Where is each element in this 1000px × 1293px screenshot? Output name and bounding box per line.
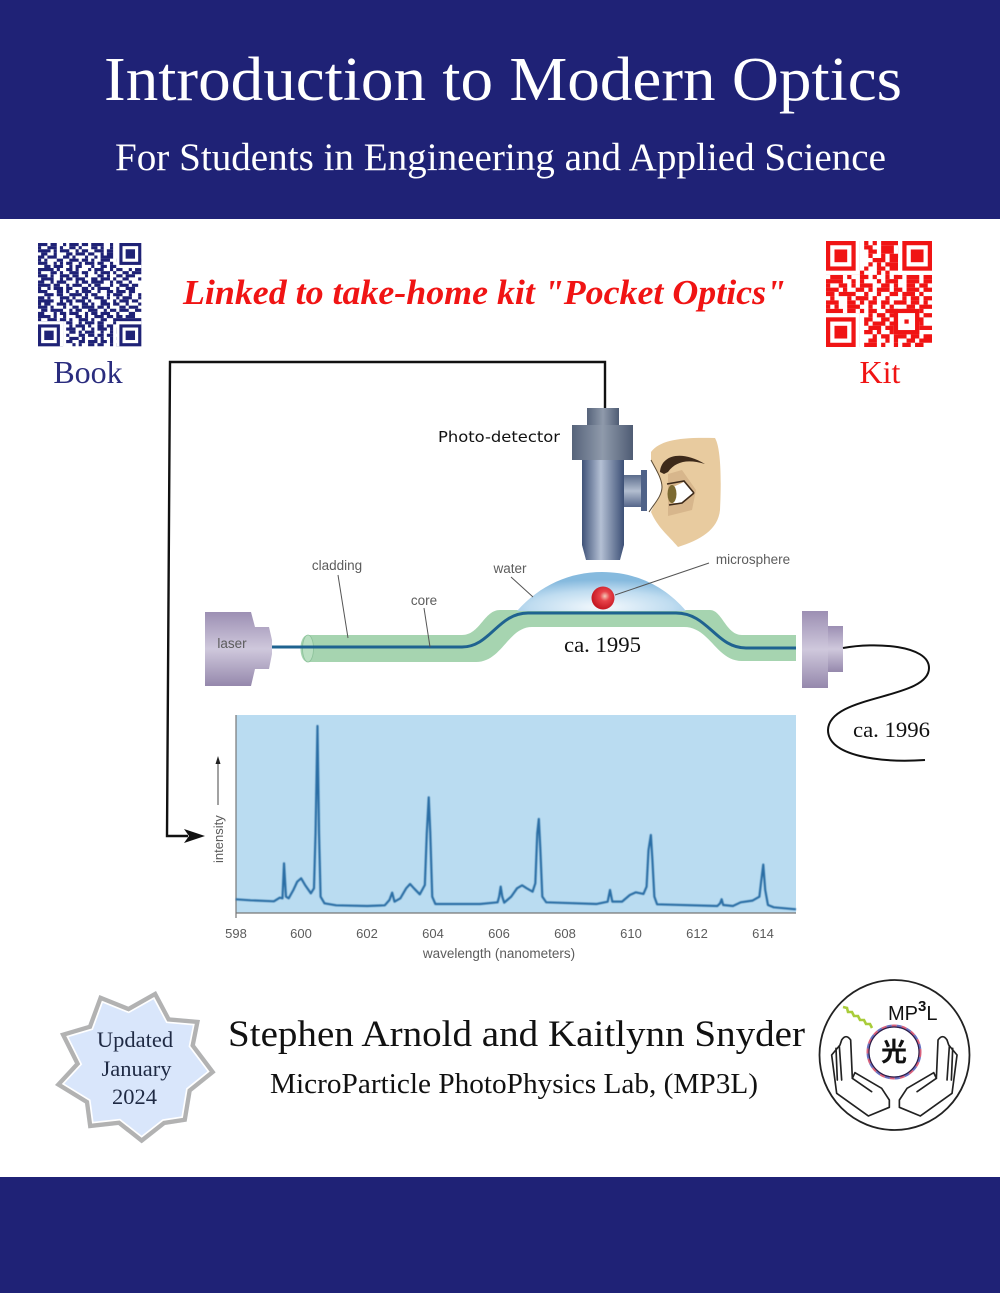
QR finder squares: book xyxy=(38,243,141,346)
QR label: Book: Book xyxy=(53,354,123,390)
y axis title: intensity xyxy=(211,815,226,863)
x axis tick labels: 602 xyxy=(356,926,378,941)
x axis tick labels: 610 xyxy=(620,926,642,941)
label: microsphere: microsphere xyxy=(716,552,790,567)
header band xyxy=(0,0,1000,219)
label: water: water xyxy=(492,561,527,576)
tagline: Linked to take-home kit "Pocket Optics" xyxy=(182,273,786,312)
label: core: core xyxy=(411,593,437,608)
output detector xyxy=(802,611,843,688)
footer band xyxy=(0,1177,1000,1293)
QR code: book xyxy=(38,243,141,346)
x axis tick labels: 598 xyxy=(225,926,247,941)
QR finder squares: kit xyxy=(826,241,932,347)
laser xyxy=(205,612,272,686)
x axis tick labels: 604 xyxy=(422,926,444,941)
subtitle: For Students in Engineering and Applied Science xyxy=(115,136,886,179)
left hand xyxy=(832,1037,889,1116)
authors: Stephen Arnold and Kaitlynn Snyder xyxy=(228,1014,805,1055)
x axis tick labels: 608 xyxy=(554,926,576,941)
date label: ca. 1996: ca. 1996 xyxy=(853,717,930,742)
x axis tick labels: 612 xyxy=(686,926,708,941)
label: core xyxy=(411,593,437,647)
label: cladding xyxy=(312,558,362,638)
character: light: 光 xyxy=(881,1032,907,1069)
badge: updated January 2024 xyxy=(55,991,216,1143)
logo lettering: MP xyxy=(888,1003,918,1025)
right hand xyxy=(899,1037,957,1116)
label: cladding: cladding xyxy=(312,558,362,573)
microsphere ring xyxy=(868,1026,920,1078)
waveguide: cladding and core xyxy=(272,610,796,662)
x axis tick labels: 606 xyxy=(488,926,510,941)
x axis tick labels: 614 xyxy=(752,926,774,941)
logo lettering: L xyxy=(926,1003,937,1025)
spectrum line xyxy=(236,726,796,909)
date label: ca. 1995: ca. 1995 xyxy=(564,632,641,657)
photo-detector assembly xyxy=(572,408,647,560)
lab name: MicroParticle PhotoPhysics Lab, (MP3L) xyxy=(270,1068,758,1100)
logo: MP3L xyxy=(820,980,970,1130)
logo lettering: 3 xyxy=(918,998,926,1015)
QR code: kit xyxy=(826,241,932,347)
QR label: Kit: Kit xyxy=(860,354,901,390)
arrow: detector signal wire to chart xyxy=(167,362,605,843)
water droplet xyxy=(517,572,686,611)
chart: spectrum xyxy=(211,715,796,961)
x axis tick labels xyxy=(225,926,774,941)
laser: laser xyxy=(217,636,247,651)
badge: updated January 2024: 2024 xyxy=(112,1084,157,1109)
x axis tick labels: 600 xyxy=(290,926,312,941)
output fibre xyxy=(828,645,929,761)
icon: face with eye xyxy=(649,438,721,547)
title: Introduction to Modern Optics xyxy=(104,46,902,114)
badge: updated January 2024: January xyxy=(102,1056,172,1081)
green photon wave xyxy=(843,1007,872,1028)
badge: updated January 2024: Updated xyxy=(97,1027,173,1052)
x axis title: wavelength (nanometers) xyxy=(422,946,575,961)
microsphere xyxy=(592,586,614,610)
label: Photo-detector: Photo-detector xyxy=(438,428,561,446)
y axis title xyxy=(211,756,226,863)
label: water xyxy=(492,561,533,597)
label: microsphere xyxy=(615,552,790,595)
